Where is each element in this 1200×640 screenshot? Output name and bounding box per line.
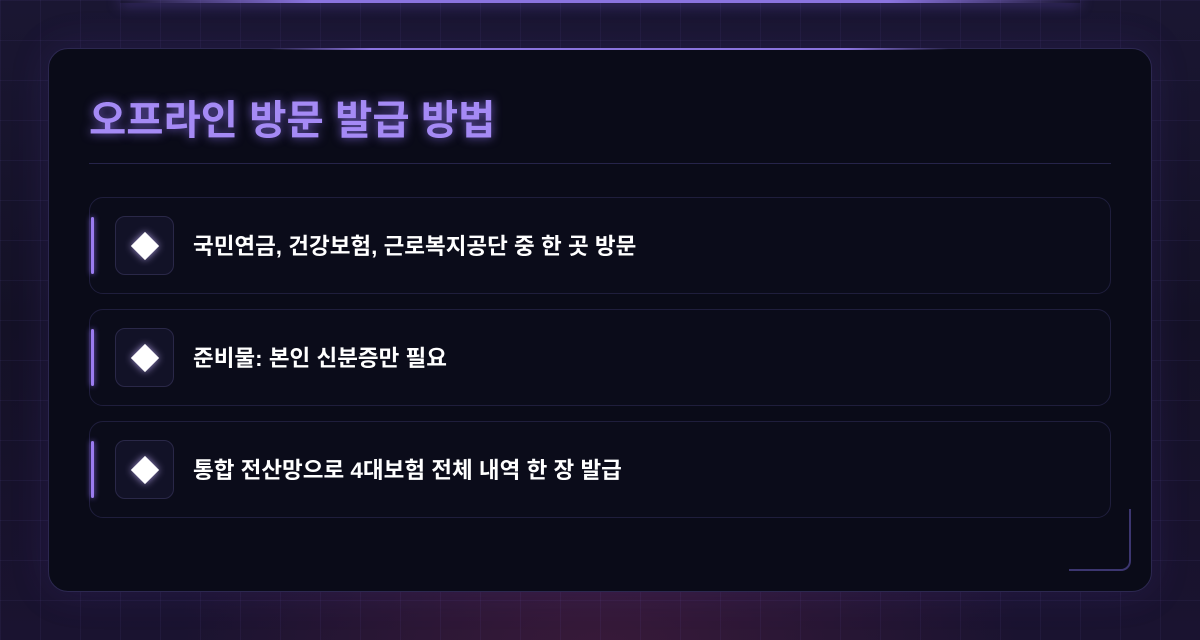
item 2 xyxy=(89,309,1111,406)
text: item 1: 국민연금, 건강보험, 근로복지공단 중 한 곳 방문 xyxy=(193,234,636,259)
item 3 xyxy=(89,421,1111,518)
text: item 2: 준비물: 본인 신분증만 필요 xyxy=(193,346,447,371)
icon: diamond xyxy=(115,328,174,387)
icon: diamond xyxy=(115,440,174,499)
text: item 3: 통합 전산망으로 4대보험 전체 내역 한 장 발급 xyxy=(193,458,622,483)
icon: diamond xyxy=(115,216,174,275)
title: 오프라인 방문 발급 방법 xyxy=(89,97,495,143)
item 1 xyxy=(89,197,1111,294)
panel: main card xyxy=(48,48,1152,592)
